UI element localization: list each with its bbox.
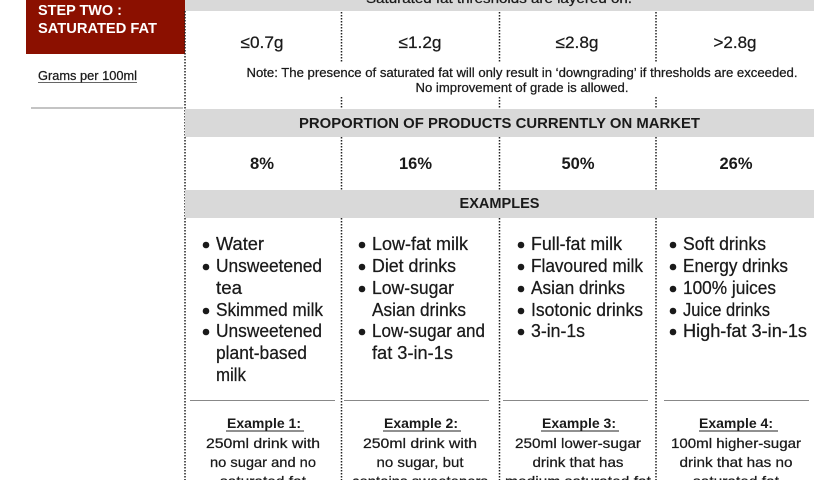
example 3: 250ml lower-sugar bbox=[515, 435, 641, 451]
note on downgrading bbox=[246, 66, 798, 95]
heading: examples bbox=[185, 190, 814, 218]
list: column 2 examples: Asian drinks bbox=[372, 300, 466, 320]
note on downgrading: Note: The presence of saturated fat will only result in ‘downgrading’ if thresholds are exceeded. bbox=[246, 66, 798, 80]
list: column 4 examples: 100% juices bbox=[683, 278, 776, 298]
example 1 bbox=[206, 415, 320, 480]
list: column 1 examples: tea bbox=[216, 278, 243, 298]
example 2: 250ml drink with bbox=[363, 435, 477, 451]
list: column 4 examples bbox=[670, 234, 807, 341]
list: column 2 examples: Diet drinks bbox=[372, 256, 456, 276]
panel: step two header bbox=[26, 0, 185, 54]
thresholds row: >2.8g bbox=[714, 33, 756, 52]
list: column 2 examples: fat 3-in-1s bbox=[372, 343, 453, 363]
thresholds row bbox=[240, 33, 756, 52]
example 3 bbox=[505, 415, 651, 480]
example 1: Example 1: bbox=[227, 415, 301, 431]
example 4: drink that has no bbox=[680, 454, 793, 470]
list: column 3 examples bbox=[518, 234, 644, 341]
example 2: Example 2: bbox=[384, 415, 458, 431]
example 3: drink that has bbox=[532, 454, 624, 470]
list: column 1 examples bbox=[203, 234, 324, 385]
proportions row: 50% bbox=[562, 154, 594, 173]
example 2: no sugar, but bbox=[376, 454, 464, 470]
heading: proportion of products bbox=[185, 109, 814, 137]
list: column 3 examples: Flavoured milk bbox=[531, 256, 644, 276]
note on downgrading: No improvement of grade is allowed. bbox=[416, 81, 628, 95]
panel: step two header: STEP TWO : bbox=[38, 2, 122, 19]
list: column 4 examples: High-fat 3-in-1s bbox=[683, 321, 807, 341]
list: column 1 examples: milk bbox=[216, 365, 247, 385]
list: column 2 examples: Low-fat milk bbox=[372, 234, 469, 254]
heading: saturated fat thresholds band bbox=[185, 0, 814, 11]
list: column 2 examples: Low-sugar and bbox=[372, 321, 485, 341]
list: column 4 examples: Soft drinks bbox=[683, 234, 766, 254]
proportions row: 8% bbox=[250, 154, 274, 173]
proportions row bbox=[250, 154, 752, 173]
thresholds row: ≤2.8g bbox=[556, 33, 598, 52]
list: column 1 examples: Water bbox=[216, 234, 264, 254]
list: column 4 examples: Energy drinks bbox=[683, 256, 788, 276]
heading: proportion of products: PROPORTION OF PRODUCTS CURRENTLY ON MARKET bbox=[299, 115, 700, 132]
list: column 4 examples: Juice drinks bbox=[683, 300, 770, 320]
example 4: 100ml higher-sugar bbox=[671, 435, 801, 451]
thresholds row: ≤0.7g bbox=[240, 33, 284, 52]
list: column 3 examples: Asian drinks bbox=[531, 278, 625, 298]
list: column 1 examples: Unsweetened bbox=[216, 321, 322, 341]
list: column 1 examples: Unsweetened bbox=[216, 256, 322, 276]
example 1: no sugar and no bbox=[210, 454, 316, 470]
thresholds row: ≤1.2g bbox=[398, 33, 442, 52]
list: column 1 examples: Skimmed milk bbox=[216, 300, 324, 320]
list: column 3 examples: 3-in-1s bbox=[531, 321, 585, 341]
example 2 bbox=[352, 415, 488, 480]
list: column 3 examples: Full-fat milk bbox=[531, 234, 623, 254]
list: column 2 examples: Low-sugar bbox=[372, 278, 454, 298]
heading: examples: EXAMPLES bbox=[460, 195, 540, 212]
example 4: Example 4: bbox=[699, 415, 773, 431]
example 1: 250ml drink with bbox=[206, 435, 320, 451]
proportions row: 16% bbox=[399, 154, 432, 173]
row label: grams per 100ml: Grams per 100ml bbox=[38, 68, 137, 83]
list: column 2 examples bbox=[359, 234, 485, 363]
example 4 bbox=[671, 415, 801, 480]
list: column 1 examples: plant-based bbox=[216, 343, 307, 363]
list: column 3 examples: Isotonic drinks bbox=[531, 300, 643, 320]
example 3: Example 3: bbox=[542, 415, 616, 431]
panel: step two header: SATURATED FAT bbox=[38, 20, 157, 37]
proportions row: 26% bbox=[720, 154, 752, 173]
